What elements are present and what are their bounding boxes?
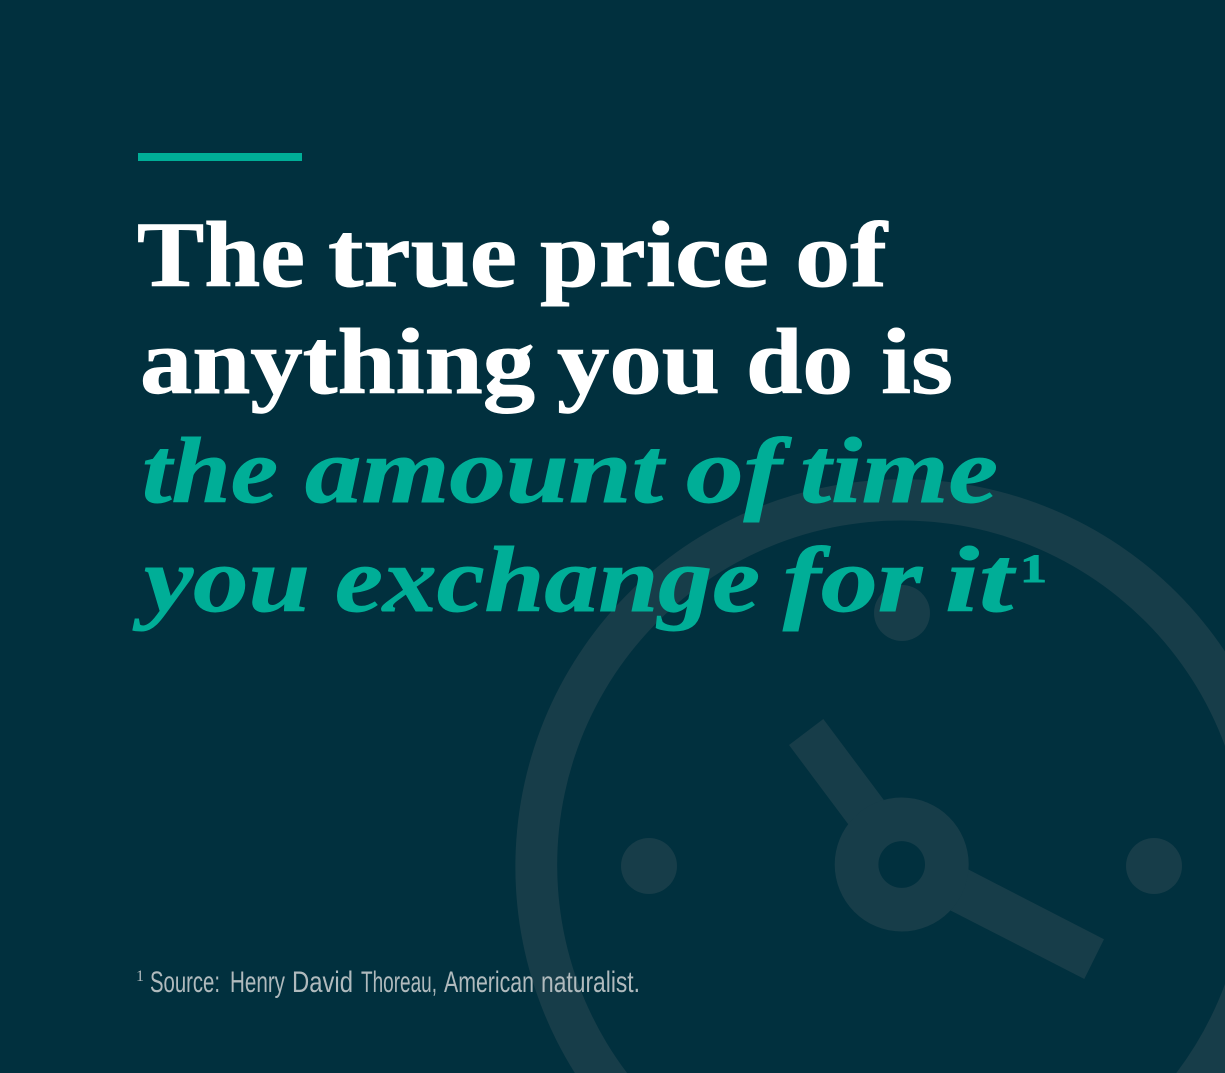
source footnote: naturalist. xyxy=(541,966,640,999)
source footnote: American xyxy=(444,966,534,999)
title: price xyxy=(540,204,769,307)
title: the xyxy=(142,420,278,523)
title: for xyxy=(783,529,923,632)
source footnote: Henry xyxy=(230,966,285,999)
title: of xyxy=(686,420,792,523)
source footnote: Source: xyxy=(150,966,220,999)
title: of xyxy=(795,204,888,307)
source footnote: David xyxy=(292,966,353,999)
title: time xyxy=(800,420,998,523)
source footnote: Thoreau, xyxy=(361,966,437,999)
source footnote xyxy=(136,966,640,999)
icon: clock watermark xyxy=(515,479,1225,1073)
title: The xyxy=(137,204,305,307)
title: true xyxy=(328,204,517,307)
title: 1 xyxy=(1020,546,1047,591)
title: do xyxy=(746,311,853,414)
title: you xyxy=(132,529,310,632)
title: amount xyxy=(305,420,667,523)
title: you xyxy=(557,311,720,414)
title xyxy=(132,204,1047,632)
title: it xyxy=(945,529,1017,632)
accent bar xyxy=(138,153,302,161)
title: exchange xyxy=(335,529,760,632)
source footnote: 1 xyxy=(136,968,144,985)
title: is xyxy=(881,311,953,414)
title: anything xyxy=(140,311,535,414)
